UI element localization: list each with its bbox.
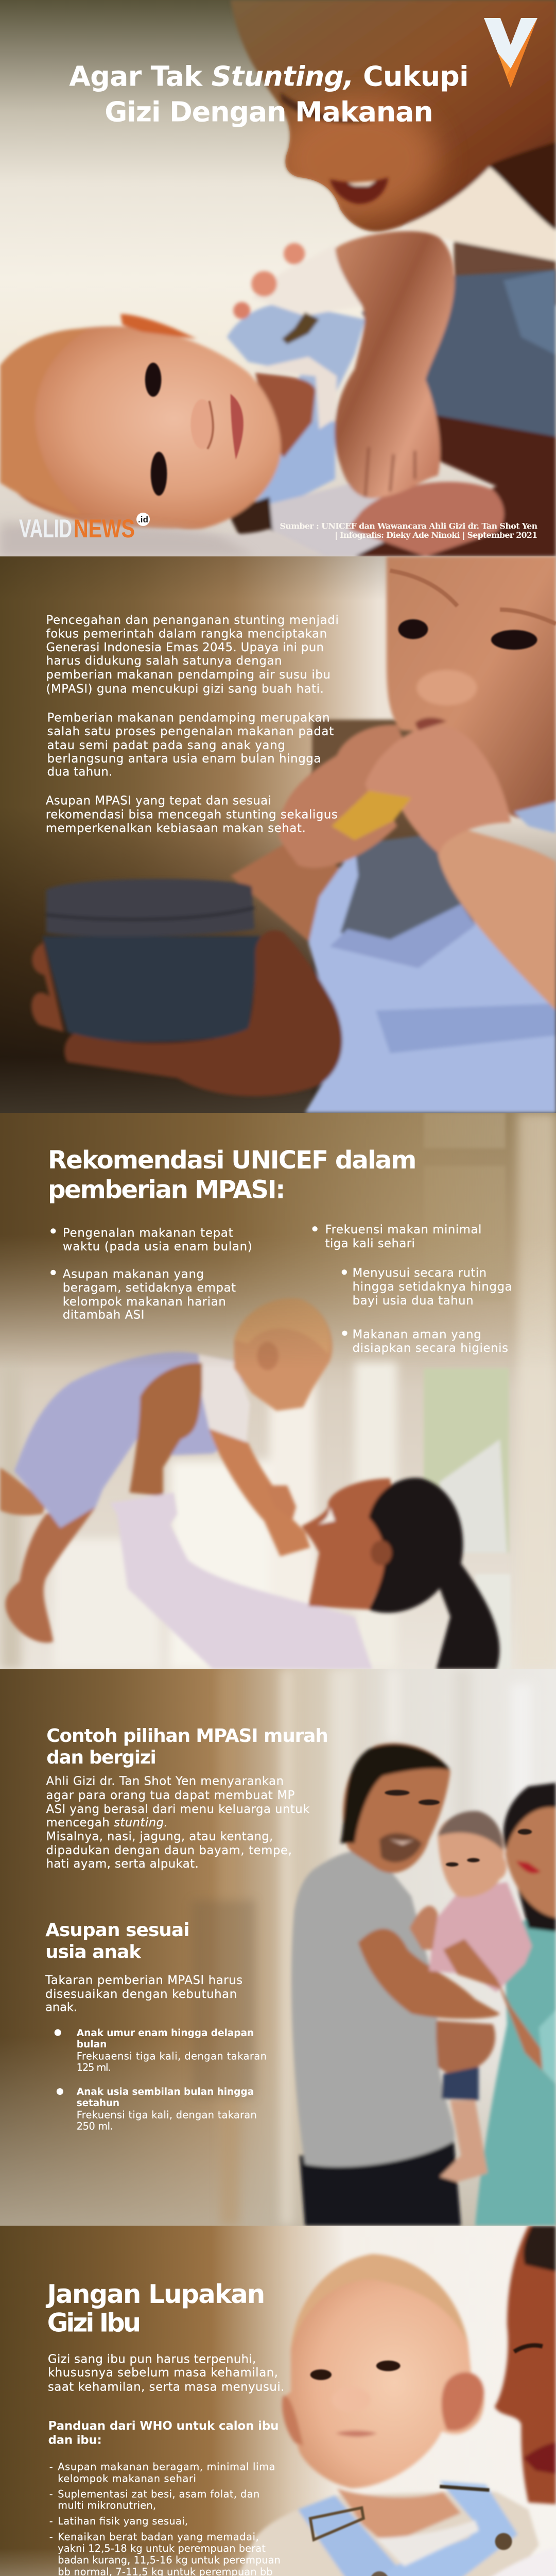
bullet: higienis: disiapkan secara higienis	[353, 1342, 508, 1355]
paragraph: gizi ibu: saat kehamilan, serta masa menyusui.	[48, 2380, 284, 2394]
intro paragraphs: pemberian makanan pendamping air susu ibu	[46, 668, 331, 682]
intro photo: baby eating, held bowl	[0, 556, 556, 1113]
bullet: beragam: kelompok makanan harian	[63, 1295, 226, 1309]
intro paragraphs: Asupan MPASI yang tepat dan sesuai	[46, 794, 271, 807]
heading: Asupan sesuai usia anak: usia anak	[45, 1942, 142, 1963]
hero title: Agar Tak Stunting, Cukupi	[69, 60, 469, 93]
list: panduan WHO: -	[49, 2488, 53, 2500]
logo: Validnews.id: VALID	[19, 514, 72, 543]
bullet: 9-12 bulan: 250 ml.	[77, 2120, 113, 2132]
heading: pemberian MPASI:	[48, 1175, 285, 1204]
intro paragraphs: memperkenalkan kebiasaan makan sehat.	[46, 822, 306, 835]
bullet: menyusui: Menyusui secara rutin	[353, 1266, 486, 1280]
photo: family by curtains	[0, 1669, 556, 2226]
list: panduan WHO: multi mikronutrien,	[58, 2500, 156, 2512]
bullet: beragam: ditambah ASI	[63, 1308, 144, 1321]
bullet: 9-12 bulan	[57, 2087, 257, 2132]
heading: Rekomendasi UNICEF dalam	[48, 1146, 416, 1175]
bullet: frekuensi: tiga kali sehari	[325, 1237, 415, 1250]
paragraph: Takaran: Takaran pemberian MPASI harus	[45, 1974, 242, 1987]
subheading: panduan WHO: dan ibu:	[48, 2434, 102, 2447]
bullet: higienis	[342, 1328, 508, 1355]
list: panduan WHO: Kenaikan berat badan yang memadai,	[58, 2531, 259, 2543]
intro paragraphs: (MPASI) guna mencukupi gizi sang buah hati.	[46, 682, 324, 696]
heading: Contoh pilihan: dan bergizi	[46, 1747, 157, 1768]
intro paragraphs: fokus pemerintah dalam rangka menciptakan	[46, 628, 327, 641]
bullet: 9-12 bulan: Anak usia sembilan bulan hingga	[77, 2087, 254, 2097]
list: panduan WHO: -	[49, 2461, 53, 2473]
heading: Asupan sesuai usia anak	[45, 1920, 189, 1963]
intro paragraphs: Pencegahan dan penanganan stunting menjadi	[46, 614, 339, 627]
bullet: tepat waktu: Pengenalan makanan tepat	[63, 1226, 233, 1240]
paragraph: Takaran	[45, 1974, 242, 2014]
bullet: beragam: Asupan makanan yang	[63, 1267, 204, 1281]
paragraph: Takaran: disesuaikan dengan kebutuhan	[45, 1988, 237, 2001]
bullet: tepat waktu: waktu (pada usia enam bulan)	[63, 1240, 252, 1253]
paragraph: gizi ibu: khususnya sebelum masa kehamilan,	[48, 2366, 278, 2380]
logo: Validnews.id	[19, 513, 150, 543]
panel: UNICEF recommendations	[0, 1113, 556, 2095]
intro paragraphs	[46, 614, 339, 835]
list: panduan WHO: kelompok makanan sehari	[58, 2472, 196, 2484]
bullet: 9-12 bulan: setahun	[77, 2098, 119, 2109]
heading	[48, 1146, 416, 1204]
logo: Validnews.id: NEWS	[74, 514, 135, 543]
list: panduan WHO: badan kurang, 11,5-16 kg untuk perempuan	[58, 2554, 281, 2566]
bullet: frekuensi: Frekuensi makan minimal	[325, 1223, 481, 1236]
bullet: menyusui: hingga setidaknya hingga	[353, 1280, 512, 1294]
list: panduan WHO: Latihan fisik yang sesuai,	[58, 2515, 188, 2527]
bullet: 6-8 bulan	[55, 2028, 267, 2074]
paragraph: Ahli Gizi: mencegah stunting.	[46, 1816, 168, 1829]
paragraph: Ahli Gizi: Ahli Gizi dr. Tan Shot Yen menyarankan	[46, 1775, 284, 1788]
bullet: menyusui: bayi usia dua tahun	[353, 1294, 474, 1308]
heading: Contoh pilihan	[46, 1725, 328, 1768]
hero title	[69, 60, 469, 128]
intro paragraphs: dua tahun.	[47, 766, 112, 779]
heading: Jangan Lupakan: Jangan Lupakan	[46, 2279, 265, 2309]
photo: mother carrying baby	[0, 2226, 556, 2576]
intro paragraphs: berlangsung antara usia enam bulan hingga	[47, 752, 321, 766]
paragraph: Ahli Gizi: agar para orang tua dapat membuat MP	[46, 1789, 294, 1802]
bullet: frekuensi	[312, 1223, 481, 1250]
subheading: panduan WHO: Panduan dari WHO untuk calon ibu	[48, 2419, 279, 2433]
intro paragraphs: atau semi padat pada sang anak yang	[47, 739, 285, 752]
photo: mother lifting baby in bright room	[0, 1113, 556, 1669]
bullet: 9-12 bulan: Frekuensi tiga kali, dengan takaran	[77, 2109, 257, 2121]
bullet: 6-8 bulan: Anak umur enam hingga delapan	[77, 2028, 254, 2039]
source credit	[280, 521, 538, 540]
paragraph: Ahli Gizi: Misalnya, nasi, jagung, atau kentang,	[46, 1830, 273, 1843]
intro paragraphs: Pemberian makanan pendamping merupakan	[47, 711, 330, 724]
logo: V mark	[484, 18, 537, 88]
hero photo: mother and baby	[0, 0, 556, 556]
paragraph: gizi ibu: Gizi sang ibu pun harus terpenuhi,	[48, 2353, 256, 2366]
bullet: 6-8 bulan: Frekuaensi tiga kali, dengan takaran	[77, 2050, 267, 2062]
bullet: tepat waktu	[50, 1226, 252, 1253]
bullet: 6-8 bulan: 125 ml.	[77, 2062, 111, 2074]
hero title: Gizi Dengan Makanan	[105, 96, 433, 128]
subheading: panduan WHO	[48, 2419, 279, 2447]
paragraph: Ahli Gizi: dipadukan dengan daun bayam, tempe,	[46, 1844, 292, 1857]
paragraph: Ahli Gizi: hati ayam, serta alpukat.	[46, 1857, 199, 1871]
paragraph: Ahli Gizi: ASI yang berasal dari menu keluarga untuk	[46, 1803, 310, 1816]
heading: Jangan Lupakan	[46, 2279, 265, 2337]
list: panduan WHO: Suplementasi zat besi, asam folat, dan	[58, 2488, 259, 2500]
bullet: beragam: beragam, setidaknya empat	[63, 1281, 236, 1295]
bullet: 6-8 bulan: bulan	[77, 2039, 107, 2050]
list: panduan WHO	[49, 2461, 281, 2576]
source credit: | Infografis: Dieky Ade Ninoki | September 2021	[335, 530, 537, 540]
heading: Asupan sesuai usia anak: Asupan sesuai	[45, 1920, 189, 1941]
paragraph: Takaran: anak.	[45, 2001, 77, 2014]
bullet: higienis: Makanan aman yang	[353, 1328, 481, 1341]
heading: Jangan Lupakan: Gizi Ibu	[47, 2308, 141, 2337]
list: panduan WHO: Asupan makanan beragam, minimal lima	[58, 2461, 275, 2473]
intro paragraphs: Generasi Indonesia Emas 2045. Upaya ini pun	[46, 641, 324, 654]
panel: intro	[0, 556, 556, 2095]
brown gradient overlay	[0, 1113, 556, 1362]
list: panduan WHO: yakni 12,5-18 kg untuk perempuan berat	[58, 2543, 266, 2554]
source credit: Sumber : UNICEF dan Wawancara Ahli Gizi dr. Tan Shot Yen	[280, 521, 538, 531]
panel: maternal nutrition	[0, 2226, 556, 2576]
intro paragraphs: salah satu proses pengenalan makanan padat	[47, 725, 334, 738]
logo: Validnews.id: .id	[138, 515, 148, 524]
heading: Contoh pilihan: Contoh pilihan MPASI murah	[46, 1725, 328, 1747]
panel: hero	[0, 0, 556, 556]
paragraph: gizi ibu	[48, 2353, 284, 2394]
bullet: beragam	[50, 1267, 236, 1321]
bullet: menyusui	[342, 1266, 512, 1308]
intro paragraphs: harus didukung salah satunya dengan	[46, 654, 282, 668]
intro paragraphs: rekomendasi bisa mencegah stunting sekaligus	[46, 808, 338, 821]
list: panduan WHO: -	[49, 2515, 53, 2527]
list: panduan WHO: -	[49, 2531, 53, 2543]
panel: MPASI examples	[0, 1669, 556, 2226]
paragraph: Ahli Gizi	[46, 1775, 310, 1871]
